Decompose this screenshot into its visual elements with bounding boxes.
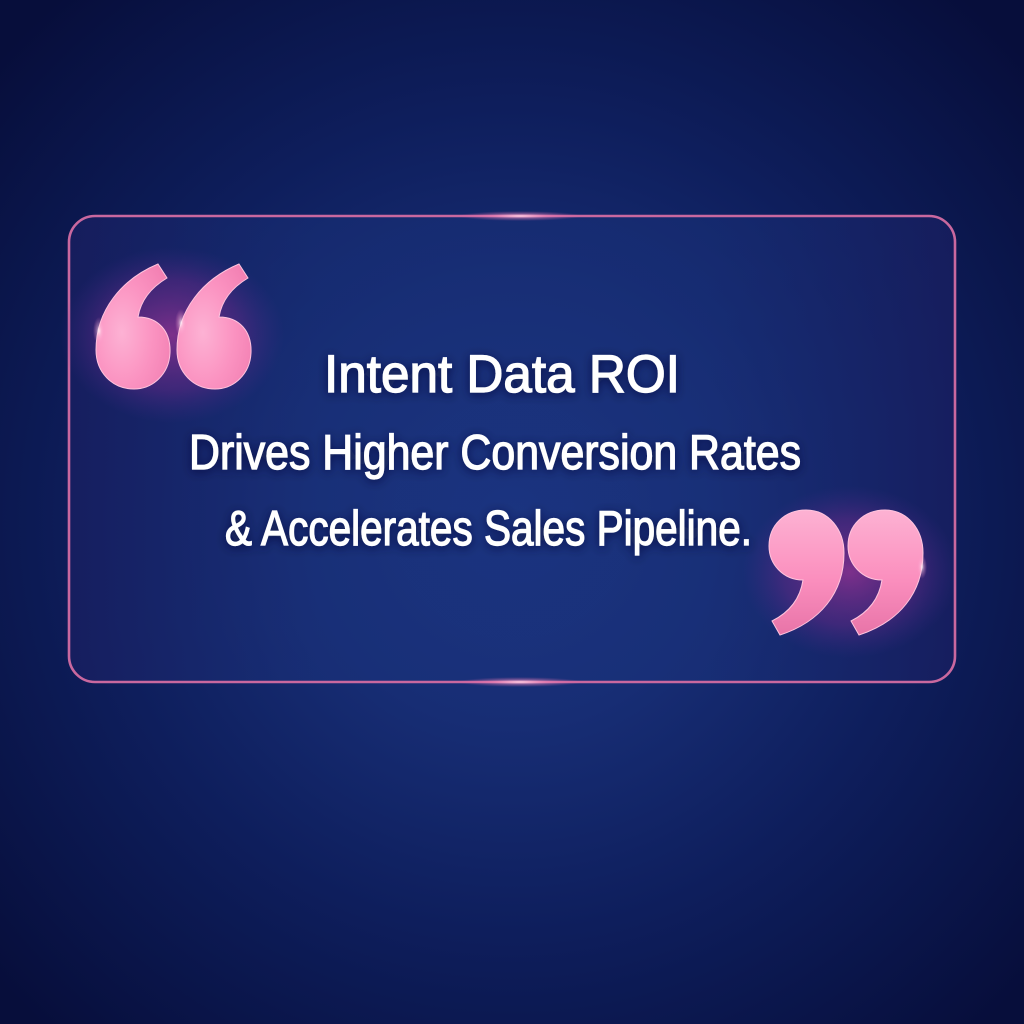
heading: Intent Data ROI	[324, 345, 680, 404]
bottom frame glow	[458, 677, 582, 687]
text line: sales pipeline: & Accelerates Sales Pipeline.	[225, 502, 752, 556]
icon: opening quotation marks	[60, 247, 284, 423]
panel: quote frame	[69, 211, 955, 687]
top frame glow	[458, 211, 582, 221]
icon: closing quotation marks	[742, 486, 958, 658]
text line: conversion rates: Drives Higher Conversion Rates	[189, 426, 801, 480]
